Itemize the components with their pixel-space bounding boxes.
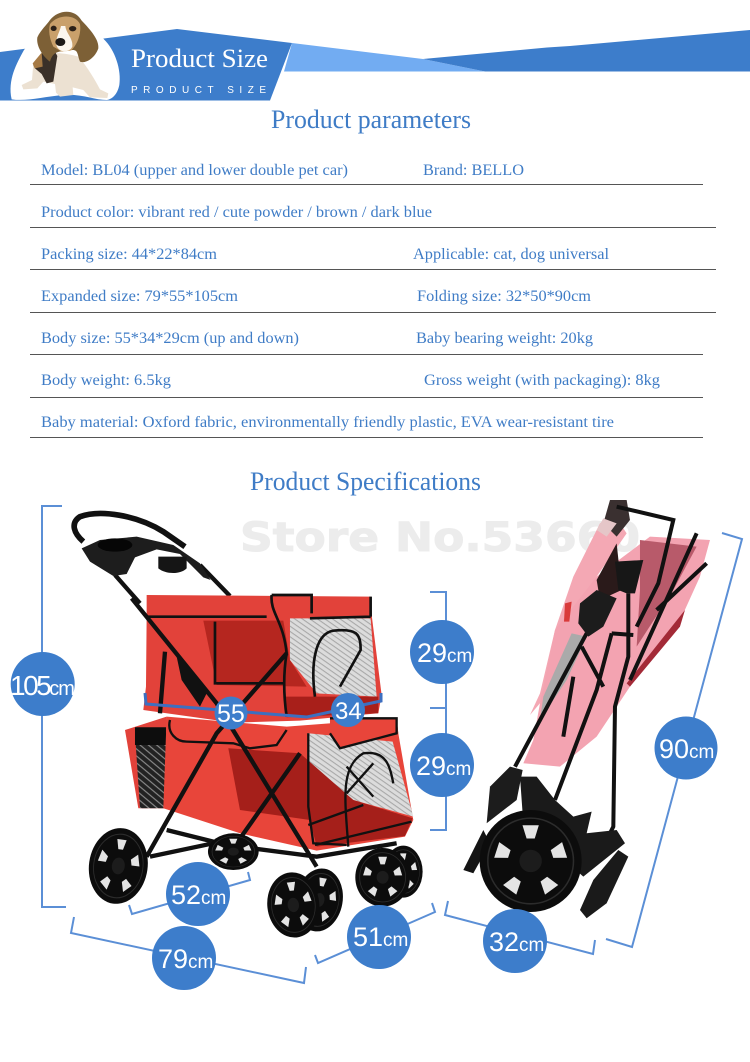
badge: 32cm: 32cm	[489, 927, 544, 957]
dimension: 55 and 34 bracket	[145, 693, 381, 717]
badge: 29cm upper: 29cm	[417, 638, 472, 668]
badge: 29cm lower: 29cm	[416, 751, 471, 781]
badge: 79cm: 79cm	[158, 944, 213, 974]
heading: product specifications: Product Specifications	[250, 467, 481, 496]
badge: 29cm upper	[410, 620, 474, 684]
dimension: 32cm bracket	[445, 901, 595, 954]
row: model: Model: BL04 (upper and lower double pet car)	[41, 162, 348, 179]
row: body size: Body size: 55*34*29cm (up and down)	[41, 330, 299, 347]
header banner	[0, 29, 750, 100]
row: material: Baby material: Oxford fabric, environmentally friendly plastic, EVA wear-resistant tire	[41, 414, 614, 431]
dimension: 51cm bracket	[315, 903, 435, 963]
dimension lines	[42, 506, 742, 983]
badge: 32cm	[483, 909, 547, 973]
row: packing size: Packing size: 44*22*84cm	[41, 246, 218, 263]
row: brand: Brand: BELLO	[423, 162, 524, 179]
frame	[132, 598, 397, 867]
badge: 55: 55	[217, 700, 245, 728]
row: gross weight: Gross weight (with packaging): 8kg	[424, 372, 660, 389]
badge: 29cm lower	[410, 733, 474, 797]
main wheel	[480, 810, 582, 912]
badge: 52cm: 52cm	[171, 880, 226, 910]
upper cabin	[143, 595, 382, 723]
banner: main blue ribbon	[0, 29, 292, 100]
row: expanded size: Expanded size: 79*55*105cm	[41, 288, 239, 305]
header subtitle: PRODUCT SIZE	[131, 85, 266, 96]
row: bearing weight: Baby bearing weight: 20kg	[416, 330, 593, 347]
folded pink stroller	[463, 500, 710, 918]
badge: 51cm	[347, 905, 411, 969]
badge: 51cm: 51cm	[353, 922, 408, 952]
icon: beagle puppy	[11, 12, 120, 100]
badge: 34	[331, 693, 365, 727]
dimension: 29cm brackets	[430, 592, 446, 830]
dimension: 90cm bracket	[606, 533, 742, 947]
row: color: Product color: vibrant red / cute powder / brown / dark blue	[41, 204, 432, 221]
row: applicable: Applicable: cat, dog universal	[413, 246, 610, 263]
badge: 79cm	[152, 926, 216, 990]
parameter table	[30, 162, 716, 438]
fabric	[530, 518, 627, 715]
storage bag	[125, 717, 170, 808]
badge: 52cm	[166, 862, 230, 926]
dimension: 105cm bracket	[42, 506, 66, 907]
frame	[515, 507, 707, 860]
row: body weight: Body weight: 6.5kg	[41, 372, 171, 389]
badge: 105cm	[10, 652, 75, 716]
badge: 90cm: 90cm	[659, 734, 714, 764]
heading: product parameters: Product parameters	[271, 105, 471, 134]
dimension: 52cm bracket	[129, 872, 250, 914]
banner: right blue ribbon	[423, 30, 750, 72]
header title: Product Size	[131, 44, 268, 73]
lower cabin	[163, 717, 413, 851]
dimension: 79cm bracket	[71, 917, 306, 983]
banner: light blue fold	[284, 43, 485, 72]
row: folding size: Folding size: 32*50*90cm	[417, 288, 592, 305]
badge: 105cm: 105cm	[10, 670, 74, 701]
rear wheel	[580, 850, 628, 918]
red double stroller	[74, 514, 423, 940]
badge: 90cm	[654, 716, 718, 780]
handle	[74, 514, 185, 547]
tray	[82, 537, 211, 580]
watermark: Store No.53660	[240, 515, 640, 561]
wheels	[208, 833, 259, 870]
badge: 34: 34	[335, 698, 362, 725]
